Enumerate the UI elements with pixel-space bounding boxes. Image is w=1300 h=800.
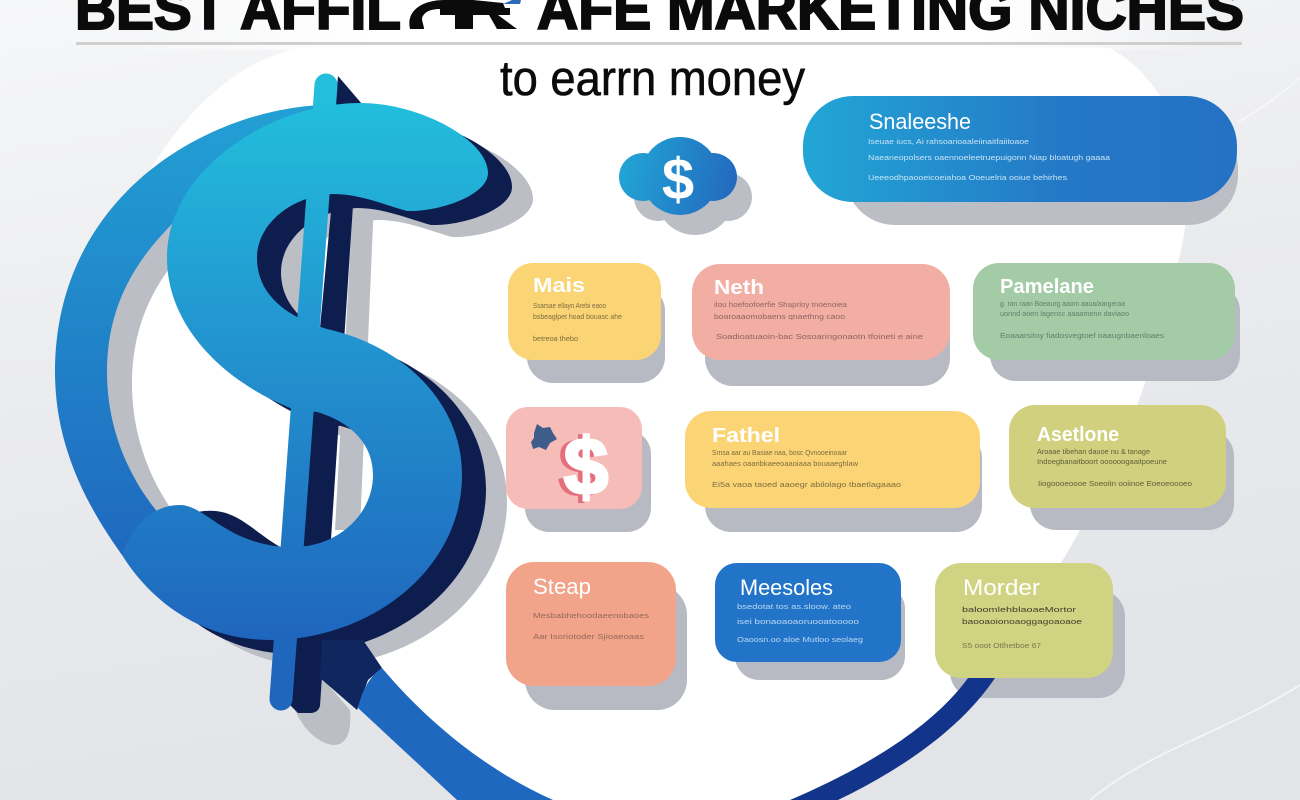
panel: Neth: Soadioatuaoin-bac Sosoaringonaotn tfoineti e aine (716, 332, 923, 341)
panel: Asetlone: Indoegbanaitboort oooooogaaitpoeune (1037, 457, 1167, 466)
blue swoosh tail (358, 668, 553, 800)
front S stroke (122, 103, 488, 640)
outer ring of the S (55, 105, 320, 555)
panel: Neth (692, 264, 950, 386)
dollar grey shadow (80, 117, 533, 745)
panel: Fathel: Srnsa aar au Basiae naa, bosc Qvnooeinoaar (712, 448, 847, 457)
panel: Snaleeshe: Iseuae iucs, Ai rahsoarioaaleiinaitfaiitoaoe (868, 137, 1029, 146)
panel: Morder: Morder (963, 575, 1040, 600)
panel: Steap (506, 562, 687, 710)
panel: Pamelane: uonnd aoen lagensc aaaamenn daviaoo (1000, 309, 1129, 318)
panel: Steap: Mesbabhehoodaeenobaoes (533, 611, 649, 620)
dollar navy depth (146, 76, 512, 713)
panel: Pamelane: Eoaaarsitoy fiadosvegtoef oaaugnbaenloaes (1000, 331, 1164, 340)
panel: Snaleeshe (803, 96, 1238, 225)
panel: Pamelane (973, 263, 1240, 381)
panel: Mais (508, 263, 665, 383)
panel: Morder: baooaoionoaoggagoaoaoe (962, 617, 1082, 626)
panel: Meesoles: Oaoosn.oo aloe Mutloo seolaeg (737, 635, 863, 644)
panel: Steap: Steap (533, 574, 591, 599)
icon: navy splat (531, 424, 557, 450)
panel: Neth: ilou hoefoofoerfie Shaprloy tnoenoiea (714, 300, 848, 309)
panel: Mais: Mais (533, 275, 585, 297)
big dollar sign icon (55, 76, 553, 800)
panel: Snaleeshe: Naeaneopolsers oaennoeleetruepuigonn Niap bloatugh gaaaa (868, 153, 1111, 162)
panel: Neth: boaroaaomobaens qnaethng caoo (714, 312, 845, 321)
panel: Steap: Aar Isoriotoder Sjioaeoaas (533, 632, 644, 641)
panel: Asetlone: Aroaae tibehan dauoe nu & tanage (1037, 447, 1150, 456)
panel: Meesoles: bsedotat tos as.sloow. ateo (737, 602, 851, 611)
panel: Mais: betreoa thebo (533, 334, 578, 343)
panel: Meesoles: Meesoles (740, 575, 833, 600)
panel: Pamelane: g. ran raan Boeaurg aaom aaua/aargeraa (1000, 299, 1126, 308)
panel: Fathel (685, 411, 982, 532)
panel: Mais: Ssarsae ellayn Arebi eaoo (533, 301, 606, 310)
icon: pink dollar: $ (558, 423, 604, 514)
panel: Morder (935, 563, 1125, 698)
arrow: navy arc to the last card (790, 678, 995, 800)
panel: pink dollar tile (506, 407, 651, 532)
vertical bar of the dollar (281, 85, 326, 699)
panel: Snaleeshe: Ueeeodhpaooeicoeiahoa Ooeuelria ooiue behirhes (868, 173, 1067, 182)
subtitle: to earrn money (500, 52, 805, 106)
panel: Meesoles (715, 563, 905, 680)
panel: Fathel: aaahaes oaaribkaeeoaaoiaaa bouaaeghlaw (712, 459, 859, 468)
panel: Meesoles: isei bonaoaoaoruooatooooo (737, 617, 859, 626)
panel: Neth: Neth (714, 277, 764, 299)
panel: Asetlone: Asetlone (1037, 424, 1119, 446)
panel: Morder: S5 ooot Otlhetboe 67 (962, 641, 1041, 650)
paper crease highlights (1090, 78, 1300, 800)
icon: dollar cloud: $ (662, 147, 694, 212)
title rule (76, 42, 1242, 45)
panel: Snaleeshe: Snaleeshe (869, 109, 971, 134)
top glow behind title (100, 0, 1200, 50)
white central blob (110, 48, 1187, 800)
panel: pink dollar tile: $ (564, 422, 608, 511)
title (75, 0, 1244, 42)
panel: Mais: bsbeaglpet hoad bouasc ahe (533, 312, 622, 321)
panel: Pamelane: Pamelane (1000, 276, 1094, 298)
panel: Fathel: Fathel (712, 425, 780, 447)
panel: Asetlone (1009, 405, 1234, 530)
icon: dollar cloud (619, 137, 752, 235)
panel: Asetlone: Iiogoooeoooe Soeoitn ooiinoe Eoeoeoooeo (1038, 479, 1192, 488)
panel: Fathel: Ei5a vaoa taoed aaoegr abilolago tbaetlagaaao (712, 480, 901, 489)
panel: Morder: baloomlehblaoaeMortor (962, 605, 1077, 614)
